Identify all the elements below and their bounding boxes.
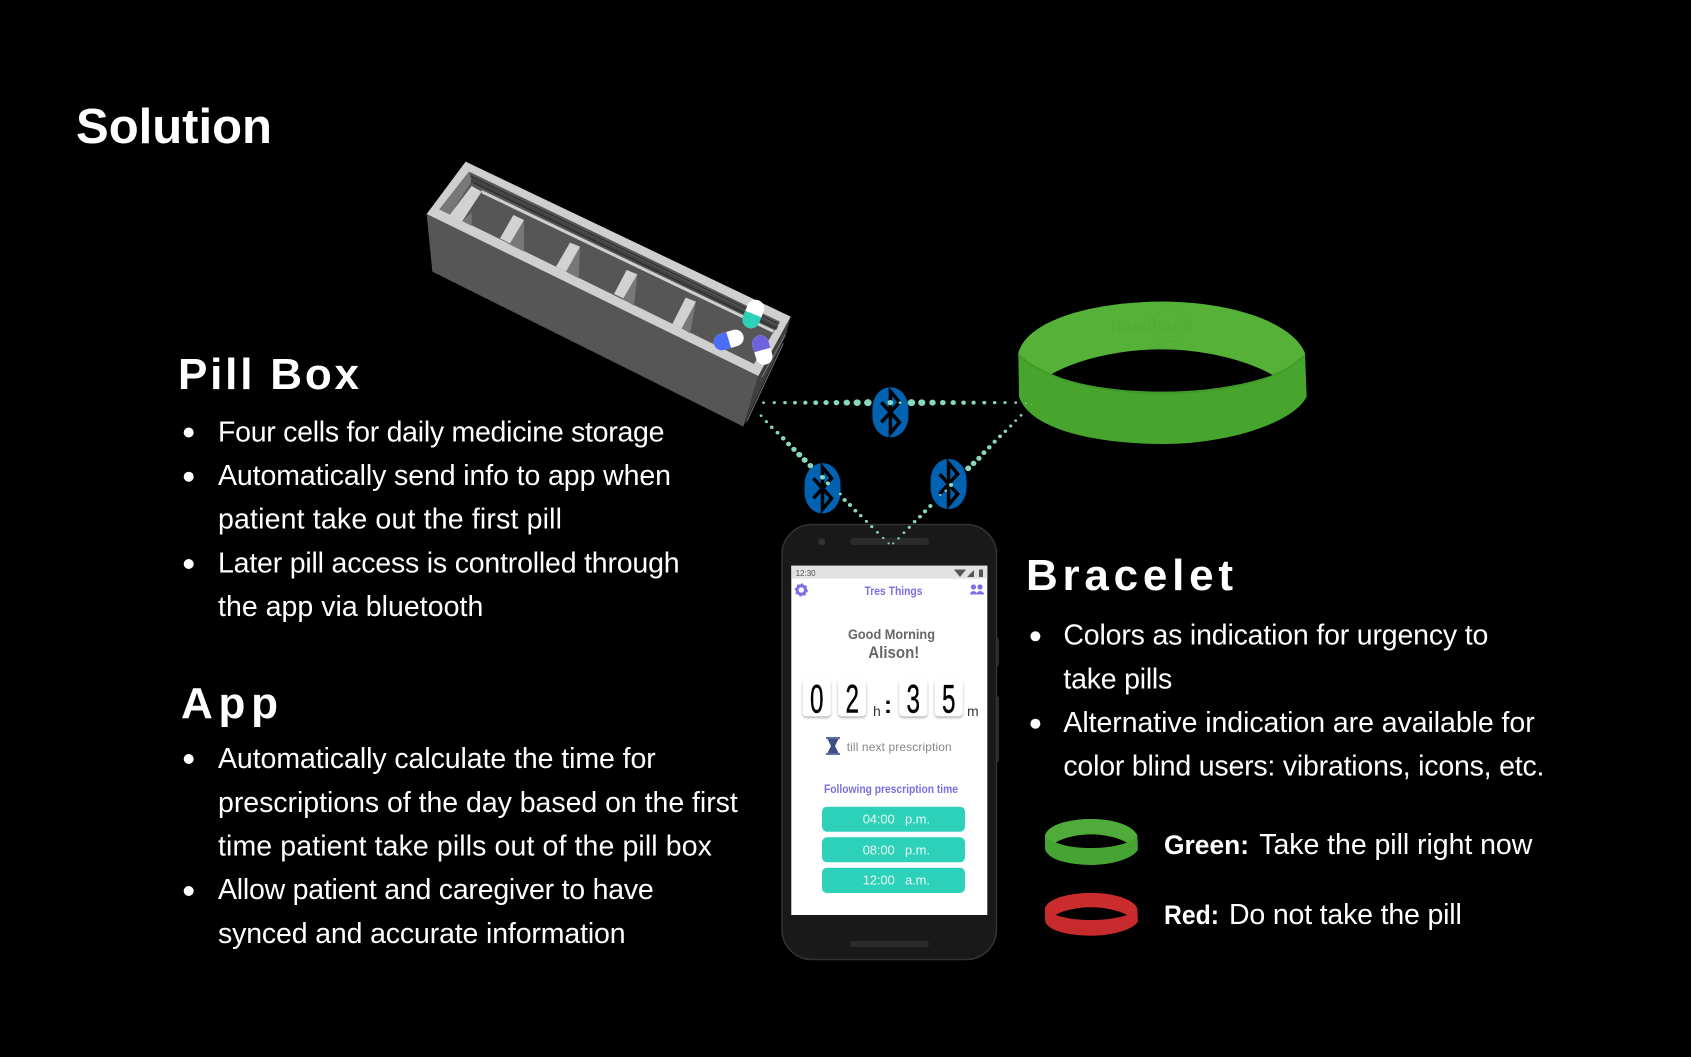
status bar: 12:30 xyxy=(796,569,816,578)
phone camera xyxy=(818,538,825,545)
pill box end face xyxy=(743,317,791,427)
countdown timer: m xyxy=(967,703,979,719)
phone home bar xyxy=(850,941,929,947)
prescription time 12:00 xyxy=(822,868,965,893)
pill box bullet list xyxy=(184,416,680,623)
illustration: phone with app xyxy=(782,524,999,960)
countdown timer xyxy=(803,678,979,722)
pill box dividers xyxy=(449,186,696,333)
app header xyxy=(796,584,984,598)
embossed band logo xyxy=(1112,309,1192,342)
phone body xyxy=(782,524,996,960)
bracelet inner surface xyxy=(1018,302,1305,375)
icon: small green bracelet xyxy=(1045,819,1138,865)
bluetooth icon: pill box to bracelet xyxy=(872,387,908,437)
legend text: green: Take the pill right now xyxy=(1259,829,1533,861)
bracelet outer band xyxy=(1018,302,1307,444)
app bullet list: Allow patient and caregiver to have xyxy=(218,874,654,906)
countdown timer: : xyxy=(884,692,892,719)
legend text: red: Do not take the pill xyxy=(1229,899,1462,931)
bluetooth icon: bracelet to phone xyxy=(931,459,967,509)
icon: people xyxy=(970,584,984,594)
pill box interior xyxy=(439,172,780,364)
pill box front face xyxy=(427,214,758,427)
prescription time 12:00: 12:00 xyxy=(863,872,895,888)
bracelet bullet list: color blind users: vibrations, icons, etc. xyxy=(1063,751,1544,783)
illustration: pill box xyxy=(427,162,791,427)
pill box bullet list: Automatically send info to app when xyxy=(218,460,671,492)
app bullet list xyxy=(184,743,738,950)
phone screen xyxy=(791,566,987,915)
app bullet list: Automatically calculate the time for xyxy=(218,743,656,775)
icon: hourglass xyxy=(826,737,840,755)
bracelet bullet list: Alternative indication are available for xyxy=(1063,707,1535,739)
prescription time 04:00 xyxy=(822,807,965,832)
app bullet list: time patient take pills out of the pill box xyxy=(218,830,712,862)
icon: settings gear xyxy=(796,584,807,596)
bracelet front edge highlight xyxy=(1018,355,1305,393)
countdown timer: h xyxy=(873,703,881,719)
heading: app: App xyxy=(181,679,278,728)
panel: app text xyxy=(181,679,738,950)
prescription time 08:00 xyxy=(822,837,965,862)
pill box bullet list: Four cells for daily medicine storage xyxy=(218,416,664,448)
following prescription heading: Following prescription time xyxy=(824,784,958,796)
countdown timer: 3 xyxy=(906,678,920,722)
bracelet bullet list: take pills xyxy=(1063,663,1172,695)
bluetooth icon: pill box to phone xyxy=(804,463,840,513)
title: Solution xyxy=(76,100,272,154)
app bullet list: prescriptions of the day based on the first xyxy=(218,787,738,819)
embossed band logo: handband xyxy=(1112,316,1192,336)
heading: bracelet: Bracelet xyxy=(1026,551,1233,600)
prescription time 04:00: p.m. xyxy=(905,812,930,826)
bracelet opening xyxy=(1052,349,1273,392)
pill box bullet list: Later pill access is controlled through xyxy=(218,547,680,579)
greeting: Good Morning xyxy=(848,626,935,642)
prescription time 08:00: p.m. xyxy=(905,842,930,857)
countdown timer: 0 xyxy=(810,678,824,722)
app bullet list: synced and accurate information xyxy=(218,918,626,950)
legend text: green: Green: xyxy=(1164,830,1249,860)
phone side buttons xyxy=(996,638,999,666)
illustration: large green bracelet xyxy=(1018,302,1307,444)
countdown timer: 2 xyxy=(846,678,859,722)
status bar xyxy=(791,566,987,579)
pill: blue xyxy=(712,328,746,352)
prescription time 12:00: a.m. xyxy=(905,872,930,888)
bracelet bullet list: Colors as indication for urgency to xyxy=(1063,620,1488,652)
dotted bluetooth connection lines xyxy=(760,399,1032,544)
legend: green bracelet xyxy=(1045,819,1533,865)
phone speaker xyxy=(850,538,929,545)
heading: pill box: Pill Box xyxy=(178,350,360,399)
pill: purple xyxy=(750,333,774,367)
prescription time 04:00: 04:00 xyxy=(863,812,895,826)
prescription time 08:00: 08:00 xyxy=(863,842,895,857)
icon: small red bracelet xyxy=(1045,893,1138,936)
legend text: red: Red: xyxy=(1164,900,1219,930)
app name: Tres Things xyxy=(864,586,922,598)
pill: teal xyxy=(740,297,767,331)
greeting xyxy=(848,626,935,662)
bracelet bullet list xyxy=(1030,620,1544,783)
pill box bullet list: the app via bluetooth xyxy=(218,591,483,623)
countdown caption: till next prescription xyxy=(847,740,952,754)
pill box top rim xyxy=(427,162,791,376)
legend: red bracelet xyxy=(1045,893,1462,936)
pill box bullet list: patient take out the first pill xyxy=(218,504,562,536)
panel: bracelet text xyxy=(1026,551,1544,783)
panel: pill box text xyxy=(178,350,680,623)
countdown timer: 5 xyxy=(942,678,956,722)
greeting: Alison! xyxy=(868,643,919,662)
